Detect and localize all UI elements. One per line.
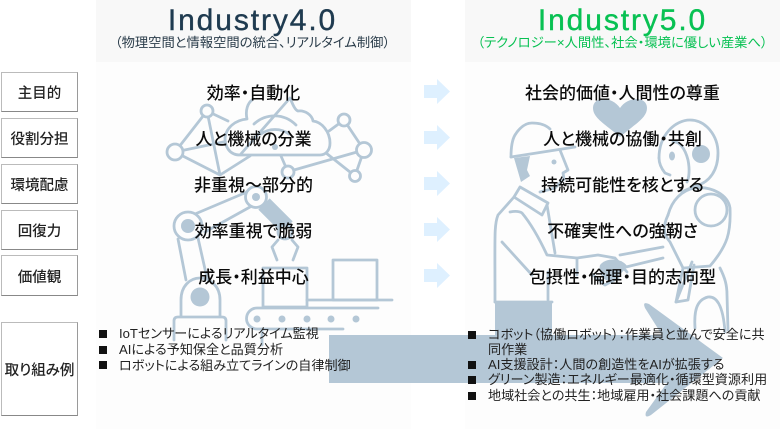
text: Industry5.0 subtitle: （テクノロジー×人間性、社会・環境に優しい産業へ） <box>477 35 768 50</box>
text: Industry4.0 subtitle: （物理空間と情報空間の統合、リアルタイム制御） <box>115 35 390 50</box>
icon: heart <box>593 99 647 137</box>
row label: 環境配慮: 環境配慮 <box>10 178 68 194</box>
heading: Industry4.0: Industry4.0 <box>168 4 337 37</box>
text block: 4.0 examples: AIによる予知保全と品質分析 <box>119 342 283 357</box>
row text: 5.0 環境配慮: 持続可能性を核とする <box>541 176 704 195</box>
panel: Industry4.0 header band <box>96 0 411 62</box>
icon: robot arm and conveyor <box>174 186 392 345</box>
arrow: row 5 <box>424 263 450 288</box>
heading: Industry5.0: Industry5.0 <box>538 4 707 37</box>
row label: 回復力: 回復力 <box>18 224 61 240</box>
text block: 4.0 examples <box>99 326 351 373</box>
text block: 5.0 examples: グリーン製造：エネルギー最適化・循環型資源利用 <box>488 372 767 387</box>
text block: 4.0 examples: IoTセンサーによるリアルタイム監視 <box>119 326 319 341</box>
panel: Industry5.0 background <box>465 0 780 429</box>
text block: 5.0 examples <box>468 327 767 403</box>
row label: 主目的 <box>1 72 78 112</box>
row label: 役割分担 <box>1 118 78 158</box>
row text: 5.0 役割分担: 人と機械の協働・共創 <box>543 130 702 149</box>
row text: 5.0 回復力: 不確実性への強靭さ <box>547 222 698 241</box>
row label: 環境配慮 <box>1 164 78 204</box>
row text: 4.0 主目的: 効率・自動化 <box>207 84 300 103</box>
row text: 4.0 価値観: 成長・利益中心 <box>198 268 309 287</box>
panel: Industry5.0 header band <box>465 0 780 62</box>
row text: 4.0 役割分担: 人と機械の分業 <box>195 130 312 149</box>
row label: 回復力 <box>1 210 78 250</box>
row label: 主目的: 主目的 <box>18 86 61 102</box>
row label: 取り組み例: 取り組み例 <box>5 363 74 379</box>
text block: 5.0 examples: コボット（協働ロボット）：作業員と並んで安全に共 <box>488 327 765 342</box>
text block: 5.0 examples: AI支援設計：人間の創造性をAIが拡張する <box>488 357 724 372</box>
row label: 価値観: 価値観 <box>18 270 61 286</box>
icon: robot <box>620 120 730 332</box>
icon: large transition arrow <box>329 303 723 416</box>
row label: 価値観 <box>1 255 78 296</box>
text block: 5.0 examples: 同作業 <box>488 342 527 357</box>
row text: 4.0 回復力: 効率重視で脆弱 <box>195 222 312 241</box>
arrow: row 3 <box>424 171 450 196</box>
text block: 4.0 examples: ロボットによる組み立てラインの自律制御 <box>119 358 351 373</box>
row text: 5.0 価値観: 包摂性・倫理・目的志向型 <box>529 268 716 287</box>
text block: 5.0 examples: 地域社会との共生：地域雇用・社会課題への貢献 <box>488 388 761 403</box>
icon: handshake <box>577 255 627 285</box>
icon: worker <box>495 123 577 335</box>
icon: cloud network <box>167 98 372 182</box>
row label: 役割分担: 役割分担 <box>10 132 68 148</box>
arrow: row 2 <box>424 125 450 150</box>
arrow: row 4 <box>424 217 450 242</box>
row text: 4.0 環境配慮: 非重視～部分的 <box>194 176 313 195</box>
panel: Industry4.0 background <box>96 0 411 429</box>
arrow: row 1 <box>424 79 450 104</box>
row label: 取り組み例 <box>1 322 78 416</box>
row text: 5.0 主目的: 社会的価値・人間性の尊重 <box>525 84 720 103</box>
